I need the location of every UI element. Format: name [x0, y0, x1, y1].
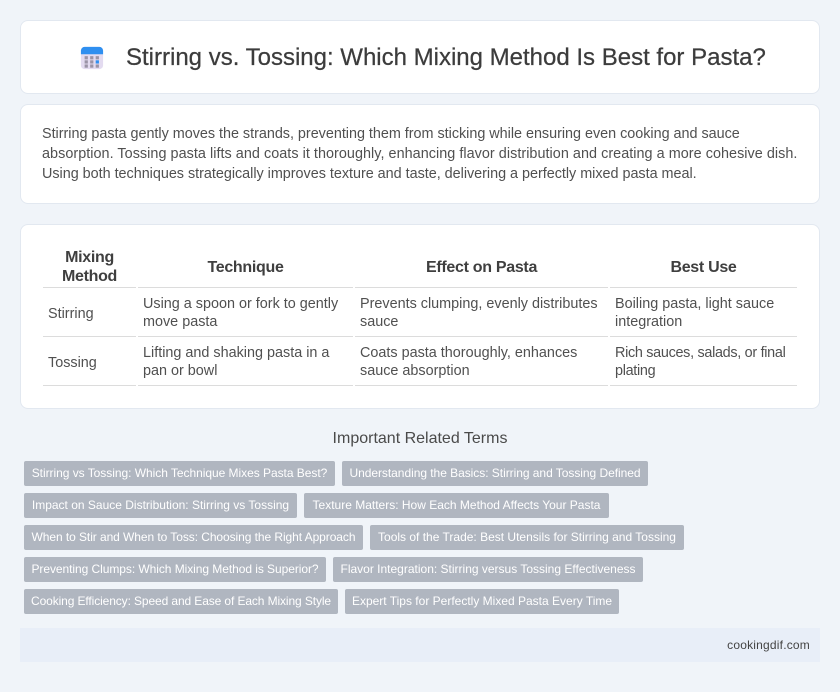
table headers: Technique — [207, 259, 284, 276]
row: stirring: Prevents clumping, evenly distributes — [360, 296, 598, 312]
tag: Tools of the Trade: Best Utensils for Stirring and Tossing — [378, 530, 676, 544]
title: Stirring vs. Tossing: Which Mixing Method Is Best for Pasta? — [126, 44, 766, 71]
panel: title header — [20, 20, 820, 94]
tag — [24, 557, 326, 582]
tag: Flavor Integration: Stirring versus Tossing Effectiveness — [340, 562, 636, 576]
tag: Cooking Efficiency: Speed and Ease of Each Mixing Style — [31, 594, 331, 608]
table headers: Method — [62, 268, 117, 285]
tag: Texture Matters: How Each Method Affects Your Pasta — [313, 498, 600, 512]
tag — [24, 493, 297, 518]
row: tossing: plating — [615, 363, 655, 379]
row: tossing: sauce absorption — [360, 363, 470, 379]
tag — [333, 557, 643, 582]
row: tossing — [43, 336, 797, 386]
footer bar — [20, 628, 820, 662]
tag: Expert Tips for Perfectly Mixed Pasta Every Time — [352, 594, 612, 608]
tag — [24, 525, 363, 550]
intro paragraph: Stirring pasta gently moves the strands, preventing them from sticking while ensuring even cooking and sauce — [42, 126, 740, 142]
table headers: Best Use — [670, 259, 737, 276]
intro paragraph: Using both techniques strategically improves texture and taste, delivering a perfectly mixed pasta meal. — [42, 166, 697, 182]
tag — [24, 461, 335, 486]
tag — [370, 525, 684, 550]
row: stirring: Using a spoon or fork to gently — [143, 296, 338, 312]
row: stirring — [43, 287, 797, 330]
row: tossing: Tossing — [48, 355, 97, 371]
intro paragraph — [42, 126, 797, 182]
table headers: Mixing — [65, 249, 114, 266]
table headers — [62, 249, 737, 285]
row: tossing: Coats pasta thoroughly, enhances — [360, 345, 577, 361]
tag — [24, 589, 338, 614]
tag — [345, 589, 619, 614]
row: stirring: integration — [615, 314, 682, 330]
tag: When to Stir and When to Toss: Choosing the Right Approach — [32, 530, 355, 544]
row: tossing: pan or bowl — [143, 363, 217, 379]
tag — [304, 493, 609, 518]
heading: related terms: Important Related Terms — [333, 430, 507, 447]
row: stirring: Stirring — [48, 306, 94, 322]
tag: Understanding the Basics: Stirring and Tossing Defined — [349, 466, 641, 480]
row: stirring: Boiling pasta, light sauce — [615, 296, 774, 312]
footer source: cookingdif.com — [727, 638, 810, 652]
tag: Impact on Sauce Distribution: Stirring vs Tossing — [32, 498, 289, 512]
tag: Preventing Clumps: Which Mixing Method is Superior? — [31, 562, 319, 576]
icon: calendar — [80, 46, 104, 70]
row: tossing: Rich sauces, salads, or final — [615, 345, 785, 361]
row: tossing: Lifting and shaking pasta in a — [143, 345, 329, 361]
table headers: Effect on Pasta — [426, 259, 537, 276]
panel: comparison table — [20, 224, 820, 409]
panel: intro text — [20, 104, 820, 204]
tag — [342, 461, 648, 486]
intro paragraph: absorption. Tossing pasta lifts and coats it thoroughly, enhancing flavor distribution and creating a more cohesive dish. — [42, 146, 797, 162]
row: stirring: sauce — [360, 314, 398, 330]
tag list: related terms — [24, 461, 684, 614]
tag: Stirring vs Tossing: Which Technique Mixes Pasta Best? — [32, 466, 327, 480]
row: stirring: move pasta — [143, 314, 217, 330]
